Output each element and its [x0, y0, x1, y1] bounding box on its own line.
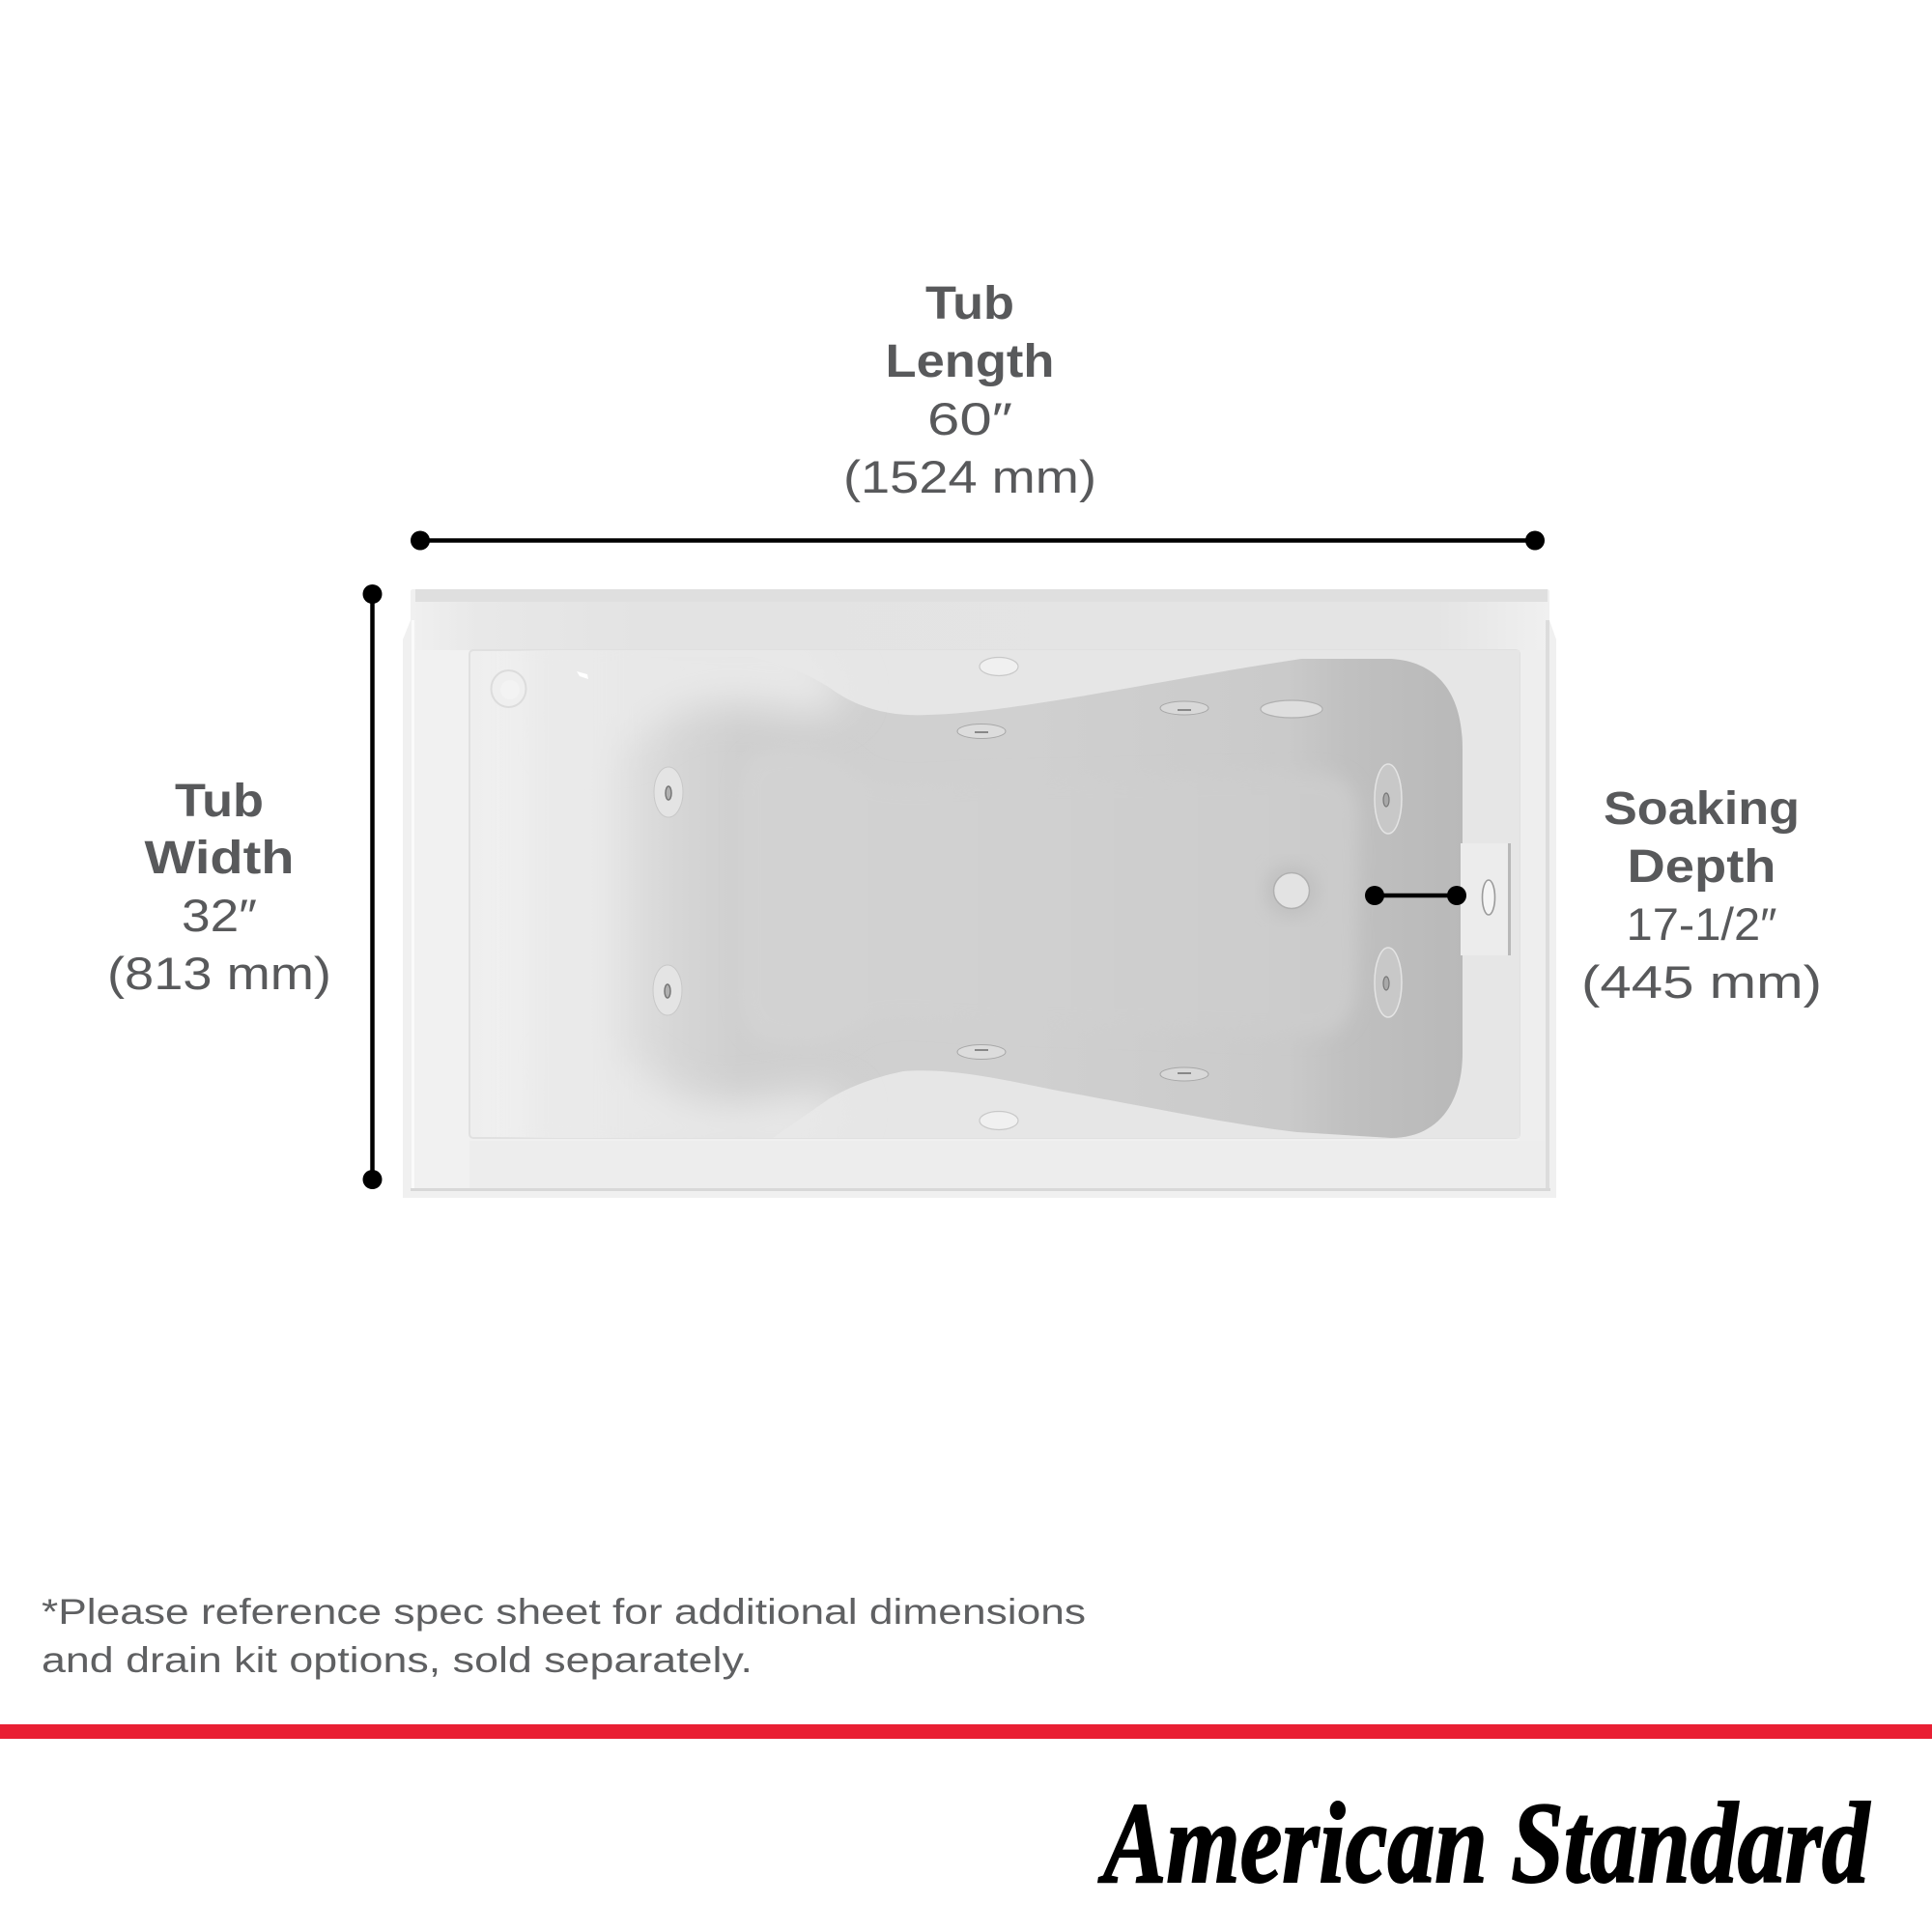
plate logo	[1482, 880, 1495, 915]
right jets	[1375, 764, 1402, 1017]
drain	[1265, 865, 1318, 917]
label: tub length	[843, 278, 1096, 502]
basin floor	[740, 748, 1358, 1046]
tub outer body	[403, 589, 1556, 1198]
overflow plate	[1461, 843, 1511, 955]
label: tub length: 60″	[927, 393, 1012, 444]
label: soaking depth: Depth	[1627, 841, 1776, 893]
label: tub width: 32″	[182, 890, 257, 941]
dimension arrow: tub width	[363, 584, 383, 1189]
label: tub width: Tub	[175, 776, 264, 827]
red divider bar	[0, 1724, 1932, 1739]
label: soaking depth	[1581, 783, 1822, 1008]
label: soaking depth: (445 mm)	[1581, 956, 1822, 1008]
label: tub width	[107, 776, 331, 999]
label: tub width: Width	[145, 833, 294, 884]
bathtub top view	[403, 589, 1556, 1198]
footnote: *Please reference spec sheet for additional dimensions	[42, 1592, 1086, 1632]
inner deck	[469, 650, 1520, 1138]
rim air controls	[980, 657, 1018, 1130]
dimension arrow: soaking depth	[1365, 886, 1466, 905]
footnote	[42, 1592, 1086, 1680]
label: soaking depth: 17-1/2″	[1627, 898, 1777, 950]
label: soaking depth: Soaking	[1604, 783, 1800, 835]
left jets	[653, 767, 683, 1015]
label: tub length: (1524 mm)	[843, 451, 1096, 502]
basin	[537, 650, 1520, 1138]
top rim band	[411, 589, 1550, 1191]
dimension arrow: tub length	[411, 531, 1545, 551]
footnote: and drain kit options, sold separately.	[42, 1640, 753, 1680]
label: tub length: Tub	[925, 278, 1014, 329]
headrest overflow	[491, 670, 588, 707]
label: tub length: Length	[885, 336, 1055, 387]
label: tub width: (813 mm)	[107, 948, 331, 999]
side jets	[957, 700, 1322, 1081]
